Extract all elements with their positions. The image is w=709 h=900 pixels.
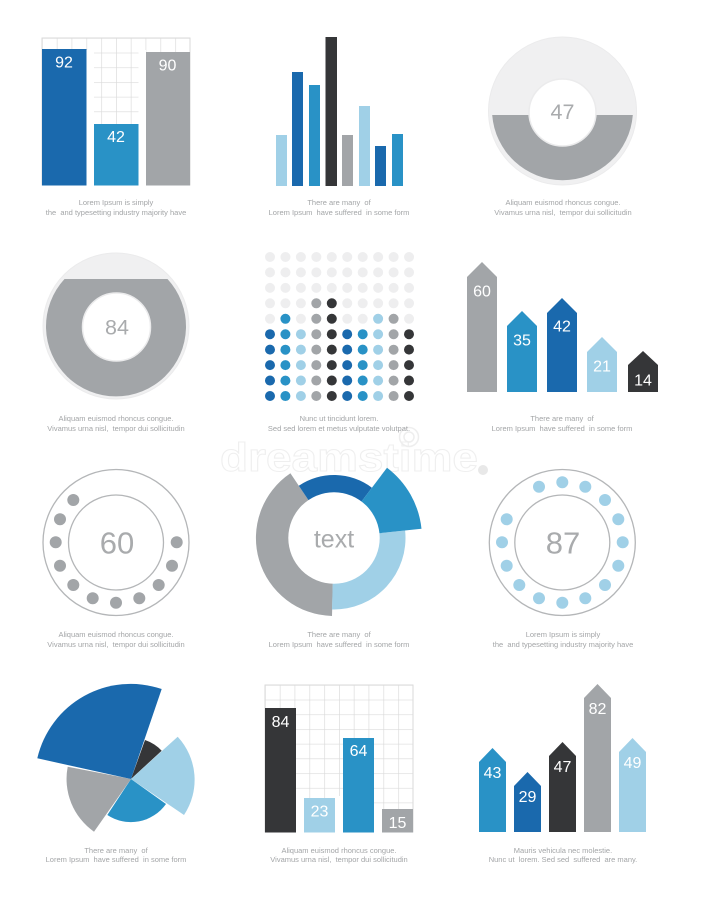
bar 64: 64 — [350, 743, 368, 760]
panel: donut 84 — [43, 253, 189, 399]
arrow 47: 47 — [554, 759, 572, 776]
bar 90 — [146, 52, 190, 186]
arrow 49: 49 — [624, 755, 642, 772]
caption 3: Aliquam euismod rhoncus congue. — [505, 198, 621, 207]
caption 12: Mauris vehicula nec molestie. — [514, 846, 612, 855]
arrow 82: 82 — [589, 701, 606, 718]
caption 6: Lorem Ipsum have suffered in some form — [492, 424, 632, 433]
arrow 14 — [628, 351, 658, 392]
arrow 21: 21 — [593, 358, 611, 376]
caption 12: Nunc ut lorem. Sed sed suffered are many. — [489, 855, 637, 864]
bar 15: 15 — [389, 815, 406, 832]
caption 7: Aliquam euismod rhoncus congue. — [58, 630, 174, 639]
panel: bar chart 84 23 64 15 — [265, 685, 413, 833]
arrow 60 — [467, 262, 497, 392]
arrow 42: 42 — [553, 318, 571, 336]
arrow 43: 43 — [484, 765, 502, 782]
bar 64 — [343, 738, 374, 832]
caption 10: Lorem Ipsum have suffered in some form — [46, 855, 186, 864]
caption 3: Vivamus urna nisl, tempor dui sollicitudin — [494, 208, 632, 217]
arrow 14: 14 — [634, 372, 652, 390]
caption 1: the and typesetting industry majority have — [46, 208, 186, 217]
bar 23: 23 — [311, 804, 328, 820]
panel: ring gauge 60 — [43, 470, 189, 616]
bar 42 — [94, 124, 138, 186]
caption 11: Vivamus urna nisl, tempor dui sollicitudin — [270, 855, 408, 864]
caption 1: Lorem Ipsum is simply — [79, 198, 153, 207]
bar 84 — [265, 708, 296, 832]
panel: ring gauge 87 — [489, 470, 635, 616]
panel: radial donut with text: text — [314, 526, 354, 554]
caption 11: Aliquam euismod rhoncus congue. — [281, 846, 397, 855]
bar 92 — [42, 49, 86, 186]
caption 8: Lorem Ipsum have suffered in some form — [269, 640, 409, 649]
panel: donut 47 — [488, 37, 636, 185]
panel: donut 47: 47 — [551, 100, 574, 124]
caption 9: Lorem Ipsum is simply — [526, 630, 600, 639]
arrow 82 — [584, 684, 611, 832]
caption 2: Lorem Ipsum have suffered in some form — [269, 208, 409, 217]
caption 6: There are many of — [530, 414, 594, 423]
panel: arrow bars 60 35 42 21 14 — [467, 262, 658, 392]
caption 9: the and typesetting industry majority have — [493, 640, 633, 649]
arrow 21 — [587, 337, 617, 392]
bar 92: 92 — [55, 54, 73, 72]
caption 4: Vivamus urna nisl, tempor dui sollicitudin — [47, 424, 185, 433]
panel: dot matrix — [270, 257, 415, 400]
caption 2: There are many of — [307, 198, 371, 207]
caption 5: Sed sed lorem et metus vulputate volutpat. — [268, 424, 410, 433]
panel: polar pie chart — [37, 684, 195, 832]
arrow 35 — [507, 311, 537, 392]
caption 10: There are many of — [84, 846, 148, 855]
panel: ring gauge 87: 87 — [546, 526, 580, 560]
arrow 43 — [479, 748, 506, 832]
panel: eight-bar chart — [276, 37, 403, 186]
arrow 29: 29 — [519, 789, 536, 806]
bar 84: 84 — [272, 714, 290, 731]
watermark: dreamstime — [220, 436, 478, 480]
arrow 35: 35 — [513, 332, 531, 350]
arrow 29 — [514, 772, 541, 832]
panel: radial donut with text — [256, 468, 422, 616]
bar 42: 42 — [107, 129, 125, 146]
caption 5: Nunc ut tincidunt lorem. — [300, 414, 378, 423]
caption 7: Vivamus urna nisl, tempor dui sollicitudin — [47, 640, 185, 649]
caption 4: Aliquam euismod rhoncus congue. — [58, 414, 174, 423]
panel: arrow bars 43 29 47 82 49 — [479, 684, 646, 832]
arrow 47 — [549, 742, 576, 832]
arrow 42 — [547, 298, 577, 392]
arrow 49 — [619, 738, 646, 832]
panel: ring gauge 60: 60 — [100, 526, 134, 560]
panel: donut 84: 84 — [105, 316, 129, 340]
bar 90: 90 — [159, 58, 176, 74]
panel: bar chart 92 42 90 — [42, 38, 190, 186]
caption 8: There are many of — [307, 630, 371, 639]
arrow 60: 60 — [473, 284, 491, 300]
bar 15 — [382, 809, 413, 832]
bar 23 — [304, 798, 335, 832]
